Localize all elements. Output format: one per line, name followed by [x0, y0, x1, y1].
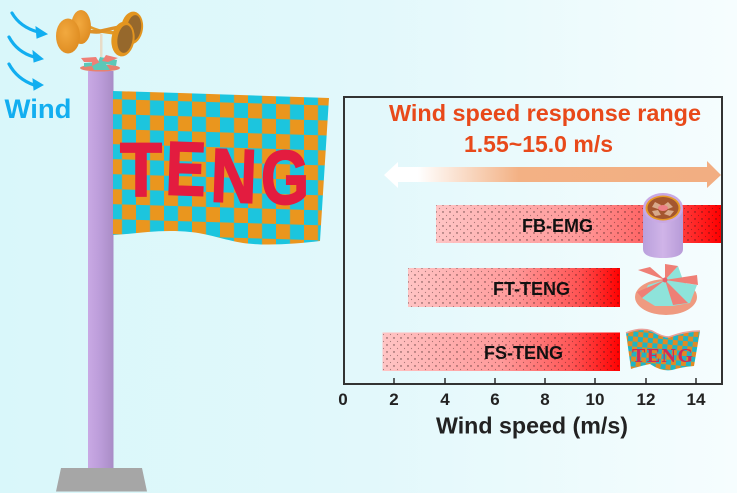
double arrow: [384, 161, 721, 188]
pole: [88, 71, 114, 468]
bar: FT-TENG: [408, 268, 620, 307]
flag: [113, 91, 329, 244]
panel: wind speed chart: [338, 97, 722, 438]
x axis tick labels: 6: [490, 390, 500, 409]
icon: small flag: TENG: [632, 345, 693, 367]
bar: FT-TENG: FT-TENG: [493, 279, 570, 299]
flag lettering: T: [120, 128, 162, 213]
heading: Wind speed response range: [389, 100, 701, 126]
x axis tick labels: 12: [637, 390, 655, 409]
chart frame: [344, 97, 722, 384]
label: Wind: Wind: [4, 94, 72, 124]
icon: small flag: [626, 329, 700, 370]
flag lettering: E: [164, 126, 207, 213]
bar: FB-EMG: FB-EMG: [522, 216, 593, 236]
x axis tick labels: [338, 390, 706, 409]
icon: anemometer: [56, 10, 145, 72]
icon: cylinder generator: [643, 193, 683, 258]
bar: FS-TENG: FS-TENG: [484, 343, 563, 363]
icon: wind arrows: [9, 13, 47, 90]
flag lettering: [120, 126, 309, 221]
icon: fan rotor: [635, 264, 698, 315]
x axis tick labels: 4: [440, 390, 450, 409]
x axis tick labels: 14: [687, 390, 706, 409]
flag lettering: N: [209, 133, 258, 220]
x axis ticks: [394, 378, 696, 384]
bar: FB-EMG: [436, 205, 721, 243]
x axis tick labels: 2: [389, 390, 399, 409]
flag lettering: G: [261, 136, 309, 221]
x axis tick labels: 8: [540, 390, 550, 409]
subheading: 1.55~15.0 m/s: [464, 131, 613, 157]
base: [56, 468, 147, 492]
x axis title: Wind speed (m/s): [436, 412, 628, 438]
x axis tick labels: 10: [586, 390, 604, 409]
bar: FS-TENG: [382, 332, 620, 371]
x axis tick labels: 0: [338, 390, 348, 409]
